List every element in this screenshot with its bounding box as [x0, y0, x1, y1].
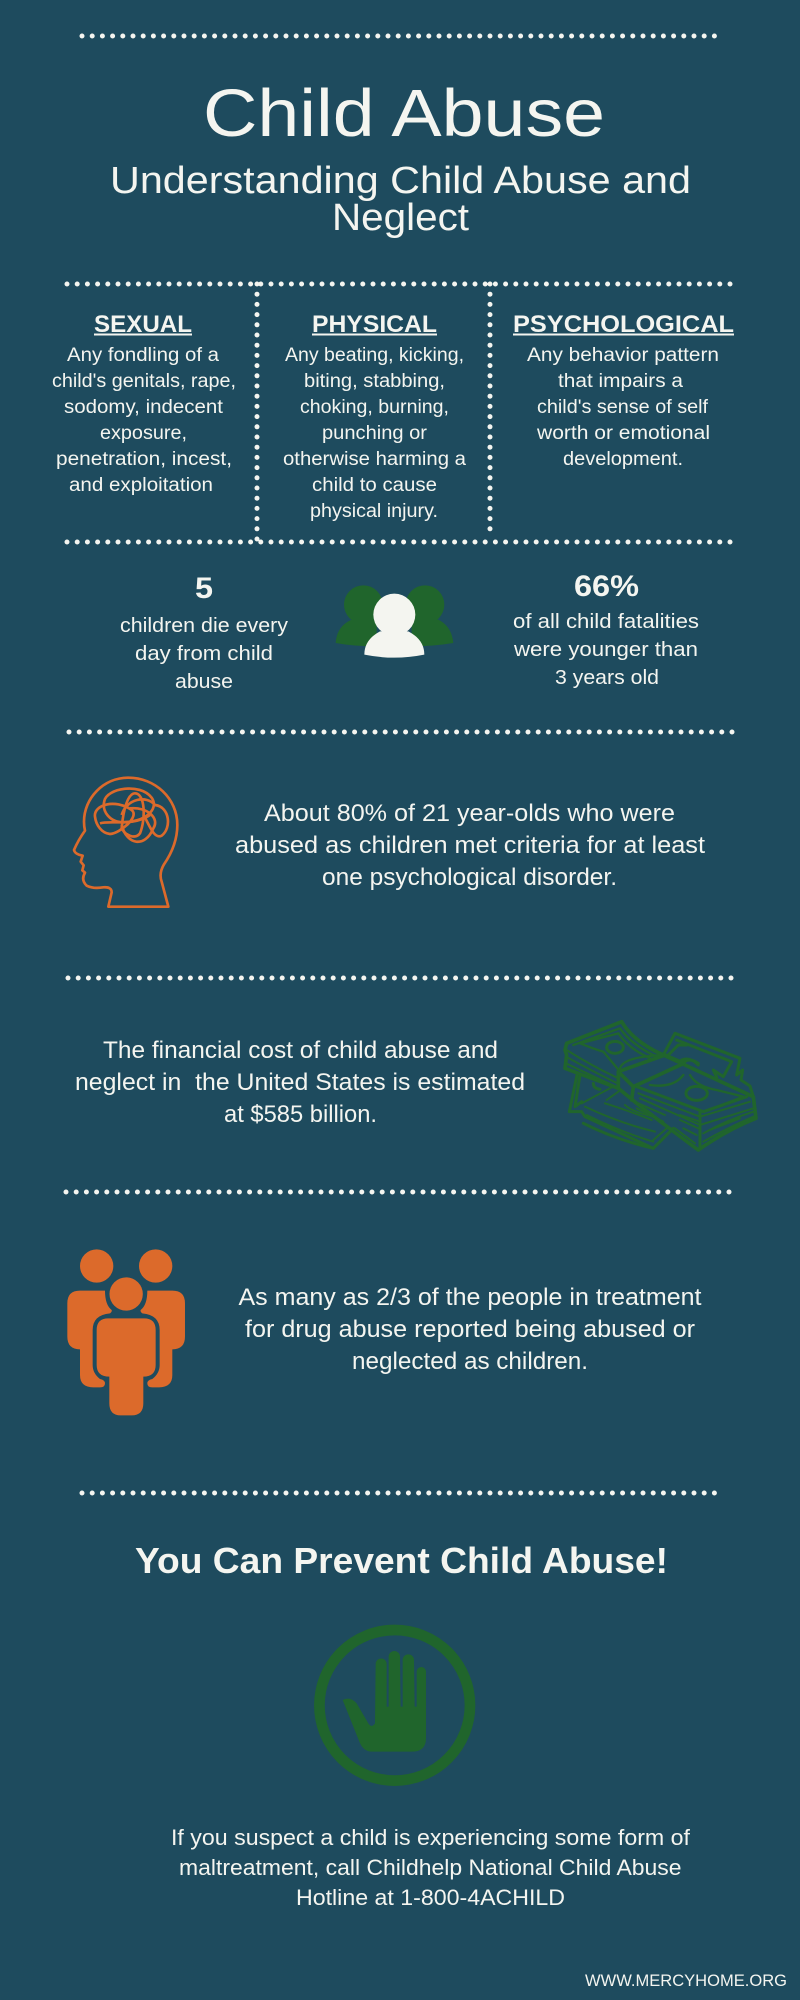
text: drug abuse statistic: neglected as children.	[352, 1348, 588, 1375]
icon: group of people	[336, 585, 453, 658]
text: sexual definition: child's genitals, rape,	[52, 371, 236, 392]
text: physical definition: physical injury.	[310, 501, 438, 522]
stat: 66 percent	[513, 570, 699, 689]
stat: 5 children: children die every	[120, 614, 289, 637]
text: hotline call to action: If you suspect a child is experiencing some form of	[171, 1825, 691, 1850]
text: sexual definition	[52, 345, 236, 496]
heading: sexual: SEXUAL	[94, 311, 192, 338]
icon: stacks of money	[565, 1022, 756, 1150]
text: physical definition: biting, stabbing,	[304, 371, 445, 392]
text: drug abuse statistic: for drug abuse reported being abused or	[245, 1316, 695, 1343]
stat: 66 percent: of all child fatalities	[513, 610, 699, 633]
subtitle: Neglect	[332, 197, 469, 239]
text: psychological definition: worth or emotional	[536, 423, 710, 444]
icon: head with tangled brain	[74, 778, 177, 907]
text: sexual definition: Any fondling of a	[67, 345, 219, 366]
text: sexual definition: sodomy, indecent	[64, 397, 224, 418]
text: financial cost statistic: at $585 billion.	[224, 1101, 377, 1128]
text: psychological definition: that impairs a	[558, 371, 683, 392]
title: Child Abuse	[203, 76, 605, 151]
text: drug abuse statistic	[238, 1284, 702, 1375]
text: sexual definition: exposure,	[100, 423, 187, 444]
panel: psychological abuse	[513, 311, 734, 470]
text: psychological definition: child's sense of self	[537, 397, 709, 418]
panel: physical abuse	[283, 311, 466, 522]
text: hotline call to action: maltreatment, call Childhelp National Child Abuse	[179, 1855, 682, 1880]
stat: 66 percent: 66%	[574, 570, 639, 603]
text: psychological disorder statistic	[235, 800, 705, 891]
stat: 5 children: abuse	[175, 670, 233, 693]
heading: psychological: PSYCHOLOGICAL	[513, 311, 734, 338]
text: physical definition: child to cause	[312, 475, 437, 496]
text: hotline call to action: Hotline at 1-800-4ACHILD	[296, 1885, 565, 1910]
text: psychological disorder statistic: abused as children met criteria for at least	[235, 832, 705, 859]
text: financial cost statistic: The financial cost of child abuse and	[103, 1037, 498, 1064]
text: financial cost statistic	[75, 1037, 525, 1128]
icon: stop hand in circle	[319, 1630, 470, 1781]
text: hotline call to action	[171, 1825, 691, 1910]
text: psychological disorder statistic: About 80% of 21 year-olds who were	[264, 800, 675, 827]
stat: 5 children: day from child	[135, 642, 273, 665]
subtitle	[110, 160, 691, 239]
subtitle: Understanding Child Abuse and	[110, 160, 691, 202]
stat: 66 percent: 3 years old	[555, 666, 659, 689]
text: financial cost statistic: neglect in the United States is estimated	[75, 1069, 525, 1096]
text: drug abuse statistic: As many as 2/3 of the people in treatment	[238, 1284, 702, 1311]
heading: you can prevent child abuse: You Can Prevent Child Abuse!	[135, 1540, 668, 1581]
heading: physical: PHYSICAL	[312, 311, 437, 338]
text: psychological definition: development.	[563, 449, 683, 470]
text: physical definition: punching or	[322, 423, 428, 444]
text: physical definition: otherwise harming a	[283, 449, 466, 470]
panel: sexual abuse	[52, 311, 236, 496]
stat: 5 children: 5	[195, 572, 213, 605]
text: psychological definition: Any behavior pattern	[527, 345, 719, 366]
text: physical definition: Any beating, kicking,	[285, 345, 464, 366]
text: psychological definition	[527, 345, 719, 470]
text: physical definition: choking, burning,	[300, 397, 449, 418]
footer: website: WWW.MERCYHOME.ORG	[585, 1972, 787, 1990]
text: physical definition	[283, 345, 466, 522]
stat: 66 percent: were younger than	[513, 638, 698, 661]
icon: three people	[67, 1249, 185, 1415]
text: sexual definition: and exploitation	[69, 475, 213, 496]
text: sexual definition: penetration, incest,	[56, 449, 232, 470]
text: psychological disorder statistic: one psychological disorder.	[322, 864, 617, 891]
stat: 5 children	[120, 572, 289, 693]
